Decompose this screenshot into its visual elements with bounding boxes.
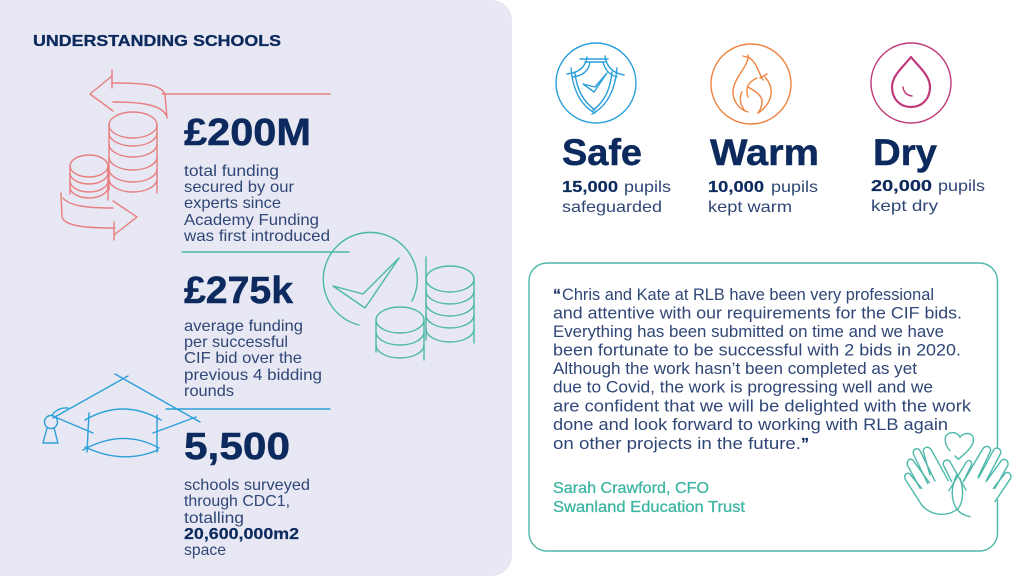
stat: 5,500 schools: schools surveyed bbox=[184, 477, 310, 494]
quote text: ” bbox=[801, 436, 809, 453]
quote text: are confident that we will be delighted with the work bbox=[553, 398, 972, 416]
stat: 5,500 schools: totalling bbox=[184, 510, 244, 527]
quote text: “ bbox=[553, 287, 561, 304]
stat: 275k per bid: average funding bbox=[184, 318, 303, 335]
quote text: on other projects in the future. bbox=[553, 435, 801, 453]
icon: flame bbox=[711, 44, 791, 124]
stat: 200M funding bbox=[183, 112, 330, 245]
panel: safe bbox=[556, 43, 671, 216]
icon: tick and coins bbox=[323, 232, 474, 360]
stat: 5,500 schools: 20,600,000m2 bbox=[184, 526, 299, 543]
panel: dry bbox=[871, 43, 985, 215]
quote text bbox=[553, 286, 972, 453]
panel: warm: pupils bbox=[771, 179, 818, 196]
quote text: due to Covid, the work is progressing well and we bbox=[553, 378, 933, 396]
quote text: Everything has been submitted on time and we have bbox=[553, 323, 944, 341]
panel: dry: kept dry bbox=[871, 198, 938, 215]
stat: 5,500 schools: through CDC1, bbox=[184, 493, 290, 510]
heading: understanding schools: UNDERSTANDING SCHOOLS bbox=[33, 33, 281, 50]
quote text: and attentive with our requirements for the CIF bids. bbox=[553, 304, 962, 322]
panel: understanding schools bbox=[0, 0, 512, 576]
icon: coins with arrows bbox=[61, 70, 330, 240]
stat: 275k per bid: £275k bbox=[184, 270, 294, 312]
stat: 200M funding: experts since bbox=[184, 195, 281, 212]
stat: 200M funding: total funding bbox=[184, 163, 279, 180]
stat: 275k per bid: CIF bid over the bbox=[184, 350, 302, 367]
stat: 5,500 schools bbox=[184, 426, 310, 559]
quote attribution: Sarah Crawford, CFO bbox=[553, 480, 709, 497]
stat: 275k per bid: rounds bbox=[184, 383, 234, 400]
panel: warm: Warm bbox=[710, 132, 819, 173]
quote attribution bbox=[553, 480, 746, 516]
stat: 5,500 schools: space bbox=[184, 542, 226, 559]
panel: warm: 10,000 bbox=[708, 179, 764, 196]
panel: safe: safeguarded bbox=[562, 199, 662, 216]
stat: 200M funding: was first introduced bbox=[183, 228, 330, 245]
icon: hands and heart bbox=[905, 433, 1011, 517]
panel: dry: Dry bbox=[873, 132, 937, 173]
icon: shield bbox=[556, 43, 636, 123]
stat: 5,500 schools: 5,500 bbox=[184, 426, 290, 468]
stat: 275k per bid: per successful bbox=[184, 334, 288, 351]
panel: safe: Safe bbox=[562, 132, 642, 173]
quote text: been fortunate to be successful with 2 bids in 2020. bbox=[553, 342, 961, 360]
quote attribution: Swanland Education Trust bbox=[553, 499, 746, 516]
panel: dry: pupils bbox=[938, 178, 985, 195]
stat: 275k per bid: previous 4 bidding bbox=[184, 367, 322, 384]
stat: 200M funding: secured by our bbox=[184, 179, 295, 196]
stat: 275k per bid bbox=[184, 270, 322, 400]
panel: warm: kept warm bbox=[708, 199, 792, 216]
stat: 200M funding: Academy Funding bbox=[184, 212, 319, 229]
quote text: done and look forward to working with RLB again bbox=[553, 416, 948, 434]
quote text: Chris and Kate at RLB have been very professional bbox=[562, 286, 934, 304]
panel: dry: 20,000 bbox=[871, 178, 932, 195]
quote text: Although the work hasn’t been completed as yet bbox=[553, 360, 917, 378]
panel: warm bbox=[708, 44, 819, 216]
icon: graduation cap bbox=[43, 374, 330, 457]
stat: 200M funding: £200M bbox=[184, 112, 311, 154]
panel: safe: pupils bbox=[624, 179, 671, 196]
panel: safe: 15,000 bbox=[562, 179, 618, 196]
panel: testimonial bbox=[529, 263, 1011, 551]
icon: water drop bbox=[871, 43, 951, 123]
